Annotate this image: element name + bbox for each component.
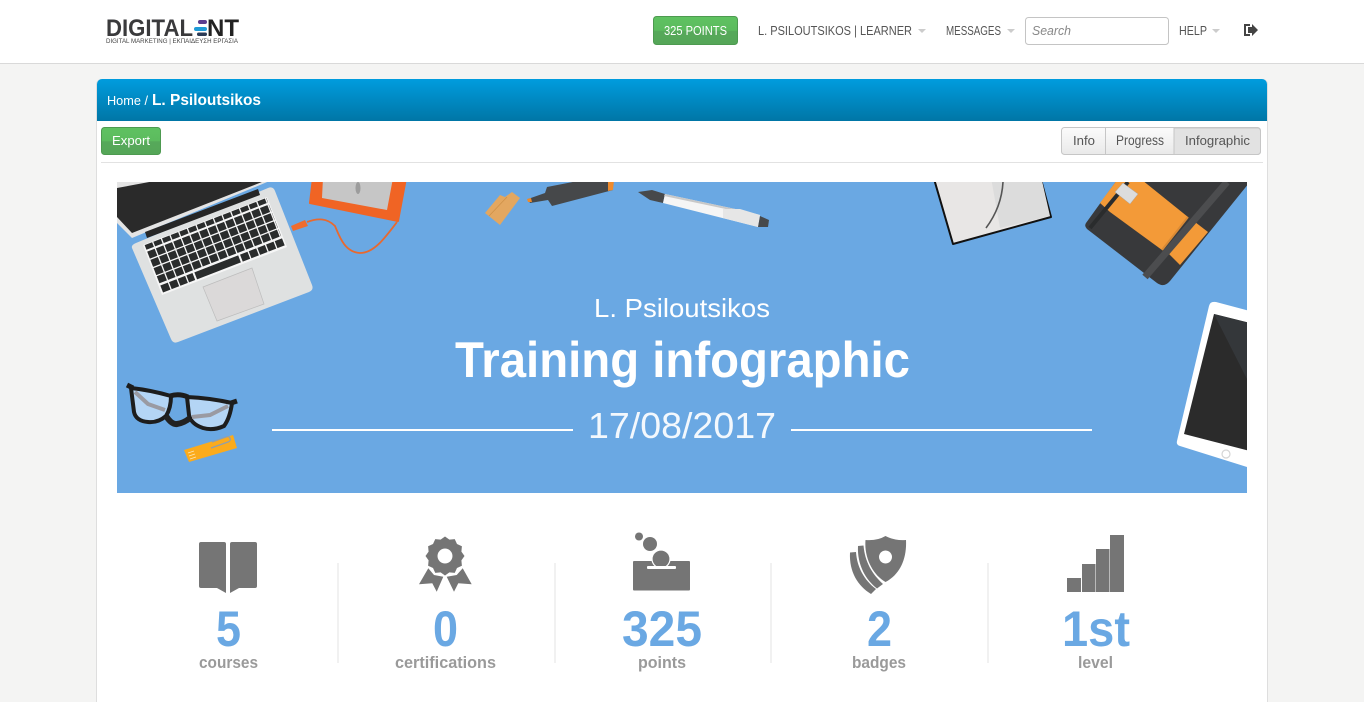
stat: courses [199,542,258,672]
user menu: L. PSILOUTSIKOS | LEARNER [758,23,912,38]
points button [654,16,738,44]
banner [117,172,1250,493]
top navigation bar [0,0,1364,64]
stat: level: level [1078,653,1113,672]
stat: certifications: 0 [433,601,458,657]
icon: book [199,542,257,593]
stat: level [1062,535,1130,672]
view tabs: Infographic [1185,133,1250,148]
icon: white notebook [934,182,1052,245]
icon: bars [1067,535,1124,592]
icon: laptop [117,180,313,343]
icon: sign out [1245,24,1258,36]
search box [1026,18,1168,44]
stat: level: 1st [1062,601,1130,657]
icon: tablet [1177,302,1250,468]
messages menu: MESSAGES [946,23,1001,38]
stat: courses: 5 [216,601,241,657]
search box: Search [1032,23,1071,38]
points button: 325 POINTS [664,23,727,38]
banner title: L. Psiloutsikos [594,293,770,323]
stat: points [622,532,702,672]
stat: badges: badges [852,653,906,672]
stat: badges: 2 [867,601,892,657]
stat: badges [850,536,906,672]
panel title bar: Home / [107,93,148,108]
icon: coin box [633,532,690,590]
view tabs: Info [1073,134,1095,148]
view tabs: Progress [1116,133,1164,148]
logo: DIGITAL [106,15,193,42]
stat: certifications [395,536,496,672]
icon: glasses [127,385,237,429]
panel: profile [96,79,1268,702]
export button [102,128,160,154]
stat dividers [337,563,989,663]
icon: orange hard drive [291,178,406,253]
logo [106,15,239,45]
export button: Export [112,133,150,148]
icon: pen [638,190,769,227]
banner title: Training infographic [455,332,910,388]
logo: NT [207,15,239,42]
stat: certifications: certifications [395,653,496,672]
icon: rosette [419,536,472,592]
stat: points: 325 [622,601,702,657]
banner title [272,293,1092,446]
banner title: 17/08/2017 [588,405,776,446]
icon: orange clip [184,435,237,462]
panel title bar [97,79,1267,121]
logo: DIGITAL MARKETING | ΕΚΠΑΙΔΕΥΣΗ ΕΡΓΑΣΙΑ [106,38,239,45]
icon: marker cap [485,192,520,225]
icon: highlighter [527,180,614,206]
stat: points: points [638,653,686,672]
icon: dark notebook [1085,180,1249,285]
view tabs [1062,128,1260,154]
stat: courses: courses [199,653,258,672]
icon: shields [850,536,906,594]
panel title bar: L. Psiloutsikos [152,92,261,109]
help menu: HELP [1179,23,1207,38]
